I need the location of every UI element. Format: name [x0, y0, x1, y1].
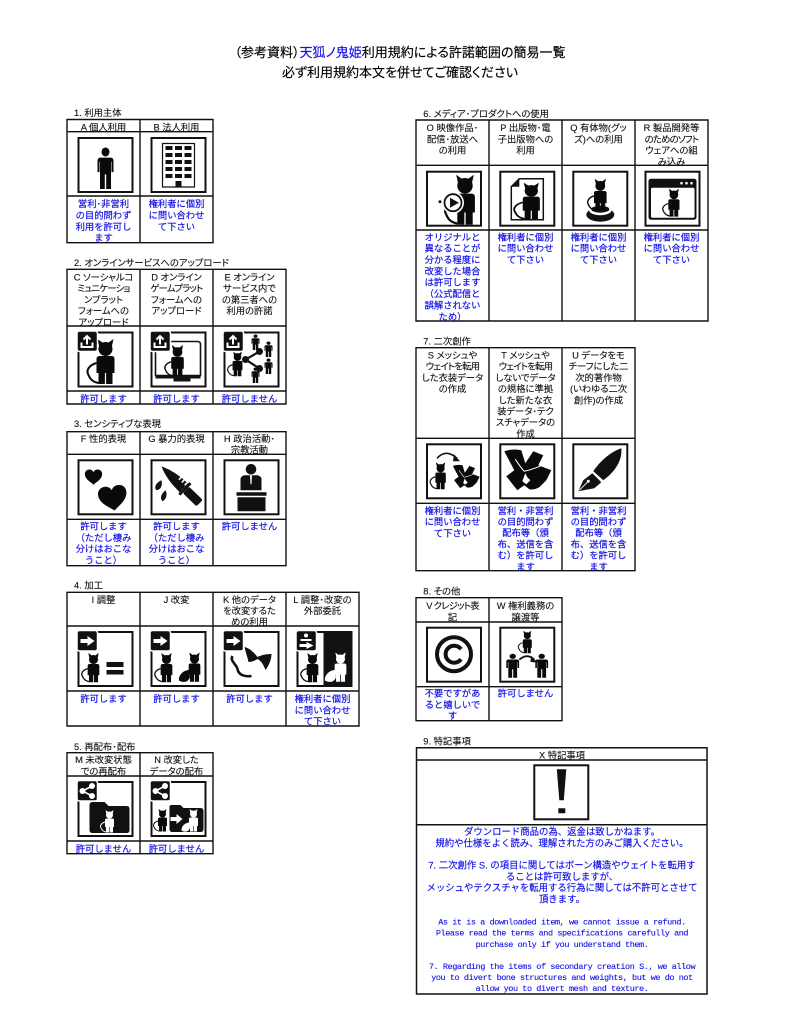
permission: T: 営利・非営利: [498, 505, 553, 516]
label: C: アップロード: [78, 318, 129, 328]
permission: U: 布、送信を含: [571, 538, 626, 549]
permission: G: 許可します: [153, 520, 200, 532]
permission: A: の目的問わず: [76, 209, 131, 220]
permission: F: 分けはおこな: [76, 544, 131, 554]
title: [235, 45, 565, 80]
label: P: 利用: [516, 145, 535, 156]
permission: S: に問い合わせ: [425, 516, 480, 527]
panel: 1 利用主体: [67, 107, 213, 243]
panel: 6 メディア・プロダクトへの使用: [416, 108, 708, 322]
label: T: 装データ･テク: [497, 406, 554, 416]
label: J: J 改変: [164, 594, 189, 605]
permission: G: （ただし棲み: [149, 532, 204, 543]
icon: knife: [152, 460, 206, 514]
panel: 3 センシティブな表現: [67, 418, 286, 566]
label: N: データの配布: [149, 765, 203, 776]
permission: P: て下さい: [507, 255, 544, 265]
panel: 9 特記事項: [416, 736, 707, 994]
permission: T: む）を許可し: [498, 550, 553, 561]
label: T: T メッシュや: [501, 350, 550, 360]
permission: U: 営利・非営利: [571, 505, 626, 516]
permission: V: 不要ですがあ: [425, 688, 480, 698]
label: K: を改変するた: [223, 605, 276, 616]
label: I: I 調整: [92, 594, 115, 605]
permission: F: 許可します: [80, 520, 127, 532]
label: T: 作成: [516, 428, 535, 439]
label: T: スチャデータの: [495, 417, 555, 428]
label: A: A 個人利用: [81, 122, 126, 132]
icon: video: [427, 172, 481, 226]
label: D: D オンライン: [151, 272, 202, 282]
permission: O: 分かる程度に: [425, 254, 480, 265]
icon: figure: [573, 172, 627, 226]
title: （参考資料）天狐ノ鬼姫利用規約による許諾範囲の簡易一覧: [235, 45, 565, 60]
label: M: での再配布: [80, 765, 126, 776]
label: S: した衣装データ: [422, 372, 484, 383]
permission: F: うこと）: [85, 555, 122, 565]
panel: 5 再配布・配布: [67, 741, 213, 854]
permission: O: オリジナルと: [425, 232, 480, 242]
label: C: ンプラット: [84, 295, 123, 305]
permission: Q: 権利者に個別: [571, 231, 626, 242]
label: C: フォームへの: [78, 306, 129, 316]
permission: E: 許可しません: [222, 393, 277, 404]
permission: O: は許可します: [425, 277, 480, 288]
icon: costume from cat: [427, 444, 481, 498]
label: W: W 権利義務の: [497, 600, 554, 611]
permission: F: （ただし棲み: [76, 532, 131, 543]
permission: V: す: [448, 711, 457, 721]
permission: D: 許可します: [153, 393, 200, 404]
notes: English: [429, 917, 696, 994]
icon: cat share to third parties: [223, 331, 278, 386]
notes: Japanese: [426, 826, 698, 905]
permission: S: て下さい: [434, 528, 471, 538]
label: C: ミュニケーショ: [77, 284, 130, 294]
permission: B: 権利者に個別: [149, 198, 204, 209]
label: U: U データをモ: [572, 350, 625, 360]
permission: M: 許可しません: [76, 843, 131, 854]
label: S: ウェイトを転用: [426, 362, 480, 372]
label: C: C ソーシャルコ: [74, 272, 133, 282]
permission: J: 許可します: [153, 693, 200, 704]
notes: Japanese: 頂きます。: [539, 894, 585, 905]
label: R: み込み: [658, 157, 685, 167]
permission: A: ます: [94, 233, 113, 243]
label: R: のためのソフト: [644, 134, 699, 144]
label: T: の規格に準拠: [498, 383, 554, 394]
label: Q: Q 有体物(グッ: [570, 122, 627, 133]
permission: P: に問い合わせ: [498, 243, 553, 254]
label: D: ゲームプラット: [150, 283, 203, 294]
permission: R: に問い合わせ: [644, 243, 699, 254]
label: K: めの利用: [231, 616, 268, 627]
permission: I: 許可します: [80, 693, 127, 704]
permission: T: 布、送信を含: [498, 538, 553, 549]
label: Q: ズ)への利用: [574, 133, 623, 144]
icon: transfer of rights: [500, 628, 554, 682]
permission: R: 権利者に個別: [644, 231, 699, 242]
label: D: アップロード: [151, 306, 202, 316]
label: T: ウェイトを転用: [499, 362, 553, 372]
label: E: サービス内で: [223, 283, 276, 294]
permission: P: 権利者に個別: [498, 231, 553, 242]
label: H: H 政治活動･: [224, 433, 275, 444]
label: G: G 暴力的表現: [148, 433, 205, 444]
label: D: フォームへの: [151, 295, 202, 305]
label: O: 配信･放送へ: [427, 133, 478, 144]
permission: T: ます: [516, 562, 535, 572]
label: U: 創作)の作成: [574, 394, 623, 405]
icon: modify: [150, 630, 206, 686]
icon: adjust: [77, 630, 132, 686]
notes: Japanese: ることは許可致しますが、: [506, 871, 618, 882]
icon: pen: [573, 444, 627, 498]
permission: U: の目的問わず: [571, 516, 626, 527]
label: H: 宗教活動: [231, 444, 268, 455]
heading: 7: 7. 二次創作: [423, 335, 471, 346]
panel: 4 加工: [67, 580, 359, 727]
label: M: M 未改変状態: [75, 754, 132, 765]
icon: costume: [500, 444, 554, 498]
permission: V: ると嬉しいで: [425, 699, 480, 710]
label: R: R 製品開発等: [644, 122, 699, 133]
panel: 7 二次創作: [416, 335, 635, 572]
panel: 2 アップロード: [67, 258, 286, 404]
label: B: B 法人利用: [154, 122, 199, 132]
permission: O: （公式配信と: [425, 288, 480, 299]
notes: English: As it is a downloaded item, we cannot issue a refund.: [438, 917, 686, 927]
title: 必ず利用規約本文を併せてご確認ください: [282, 65, 518, 80]
permission: B: て下さい: [158, 222, 195, 232]
icon: person: [78, 138, 132, 192]
notes: English: purchase only if you understand them.: [476, 940, 648, 950]
permission: G: うこと）: [158, 555, 195, 565]
permission: L: 権利者に個別: [295, 693, 350, 704]
icon: hearts: [78, 460, 132, 514]
permission: S: 権利者に個別: [425, 505, 480, 516]
icon: outsourcing: [296, 630, 352, 686]
heading: 1: 1. 利用主体: [74, 107, 122, 118]
permission: U: ます: [589, 562, 608, 572]
heading: 4: 4. 加工: [74, 580, 103, 590]
panel: 8 その他: [416, 586, 562, 721]
permission: U: 配布等（頒: [575, 527, 622, 538]
label: R: ウェアへの組: [645, 145, 698, 156]
notes: English: Please read the terms and specifications carefully and: [436, 928, 688, 938]
permission: N: 許可しません: [149, 843, 204, 854]
permission: T: の目的問わず: [498, 516, 553, 527]
notes: Japanese: メッシュやテクスチャを転用する行為に関しては不許可とさせて: [426, 882, 698, 893]
heading: 9: 9. 特記事項: [423, 736, 472, 746]
label: O: の利用: [439, 145, 466, 156]
label: E: E オンライン: [224, 272, 275, 282]
permission: H: 許可しません: [222, 520, 277, 532]
label: K: K 他のデータ: [223, 594, 276, 605]
label: L: L 調整･改変の: [293, 594, 352, 605]
icon: building: [152, 138, 206, 192]
label: X: X 特記事項: [539, 750, 586, 760]
notes: English: you to divert bone structures and weights, but we do not: [431, 973, 693, 983]
icon: tail and ribbon: [223, 630, 278, 686]
permission: L: て下さい: [304, 717, 341, 727]
label: S: の作成: [439, 383, 466, 394]
label: V: V クレジット表: [426, 601, 479, 611]
label: N: N 改変した: [154, 754, 199, 765]
heading: 6: 6. メディア･プロダクトへの使用: [423, 108, 549, 119]
label: U: (いわゆる二次: [570, 383, 627, 394]
icon: cat upload to game platform: [150, 331, 206, 386]
permission: Q: に問い合わせ: [571, 243, 626, 254]
permission: B: に問い合わせ: [149, 209, 204, 220]
permission: G: 分けはおこな: [149, 544, 204, 554]
permission: K: 許可します: [226, 693, 273, 704]
icon: politician at podium: [224, 460, 278, 514]
permission: W: 許可しません: [498, 688, 553, 698]
permission: A: 営利･非営利: [78, 198, 129, 209]
label: W: 譲渡等: [512, 611, 539, 622]
label: U: 次的著作物: [575, 372, 622, 383]
notes: Japanese: 規約や仕様をよく読み、理解された方のみご購入ください。: [435, 838, 689, 849]
notes: English: allow you to divert mesh and texture.: [476, 984, 648, 994]
label: E: 利用の許諾: [226, 305, 273, 316]
label: P: P 出版物･電: [500, 122, 551, 133]
notes: Japanese: 7. 二次創作 S. の項目に関してはボーン構造やウェイトを転用す: [428, 859, 696, 870]
label: V: 記: [448, 612, 457, 622]
permission: U: む）を許可し: [571, 550, 626, 561]
label: O: O 映像作品･: [427, 122, 478, 133]
label: E: の第三者への: [222, 294, 277, 305]
label: L: 外部委託: [304, 605, 341, 616]
label: F: F 性的表現: [81, 433, 127, 444]
icon: copyright: [427, 628, 481, 682]
permission: O: 改変した場合: [425, 265, 481, 276]
permission: T: 配布等（頒: [502, 527, 549, 538]
permission: L: に問い合わせ: [295, 704, 350, 715]
heading: 2: 2. オンラインサービスへのアップロード: [74, 258, 230, 268]
label: T: した新たな衣: [499, 394, 552, 405]
permission: Q: て下さい: [580, 255, 617, 265]
permission: A: 利用を許可し: [76, 221, 131, 232]
icon: share modified data: [150, 780, 206, 836]
heading: 5: 5. 再配布･配布: [74, 741, 135, 752]
permission: O: 異なることが: [425, 243, 481, 254]
permission: R: て下さい: [653, 255, 690, 265]
heading: 8: 8. その他: [423, 586, 460, 596]
heading: 3: 3. センシティブな表現: [74, 418, 162, 429]
notes: Japanese: ダウンロード商品の為、返金は致しかねます。: [464, 826, 660, 837]
icon: publication: [500, 172, 554, 226]
notes: English: 7. Regarding the items of secondary creation S., we allow: [429, 962, 696, 972]
label: S: S メッシュや: [428, 350, 477, 360]
permission: O: 誤解されない: [425, 299, 480, 310]
icon: share folder: [77, 780, 132, 836]
label: U: チーフにした二: [568, 362, 628, 372]
permission: O: ため）: [439, 312, 466, 322]
icon: cat upload: [77, 331, 132, 386]
label: P: 子出版物への: [498, 133, 553, 144]
permission: C: 許可します: [80, 393, 127, 404]
label: T: しないでデータ: [495, 372, 556, 383]
icon: exclamation: [534, 765, 588, 819]
icon: software window: [646, 172, 700, 226]
